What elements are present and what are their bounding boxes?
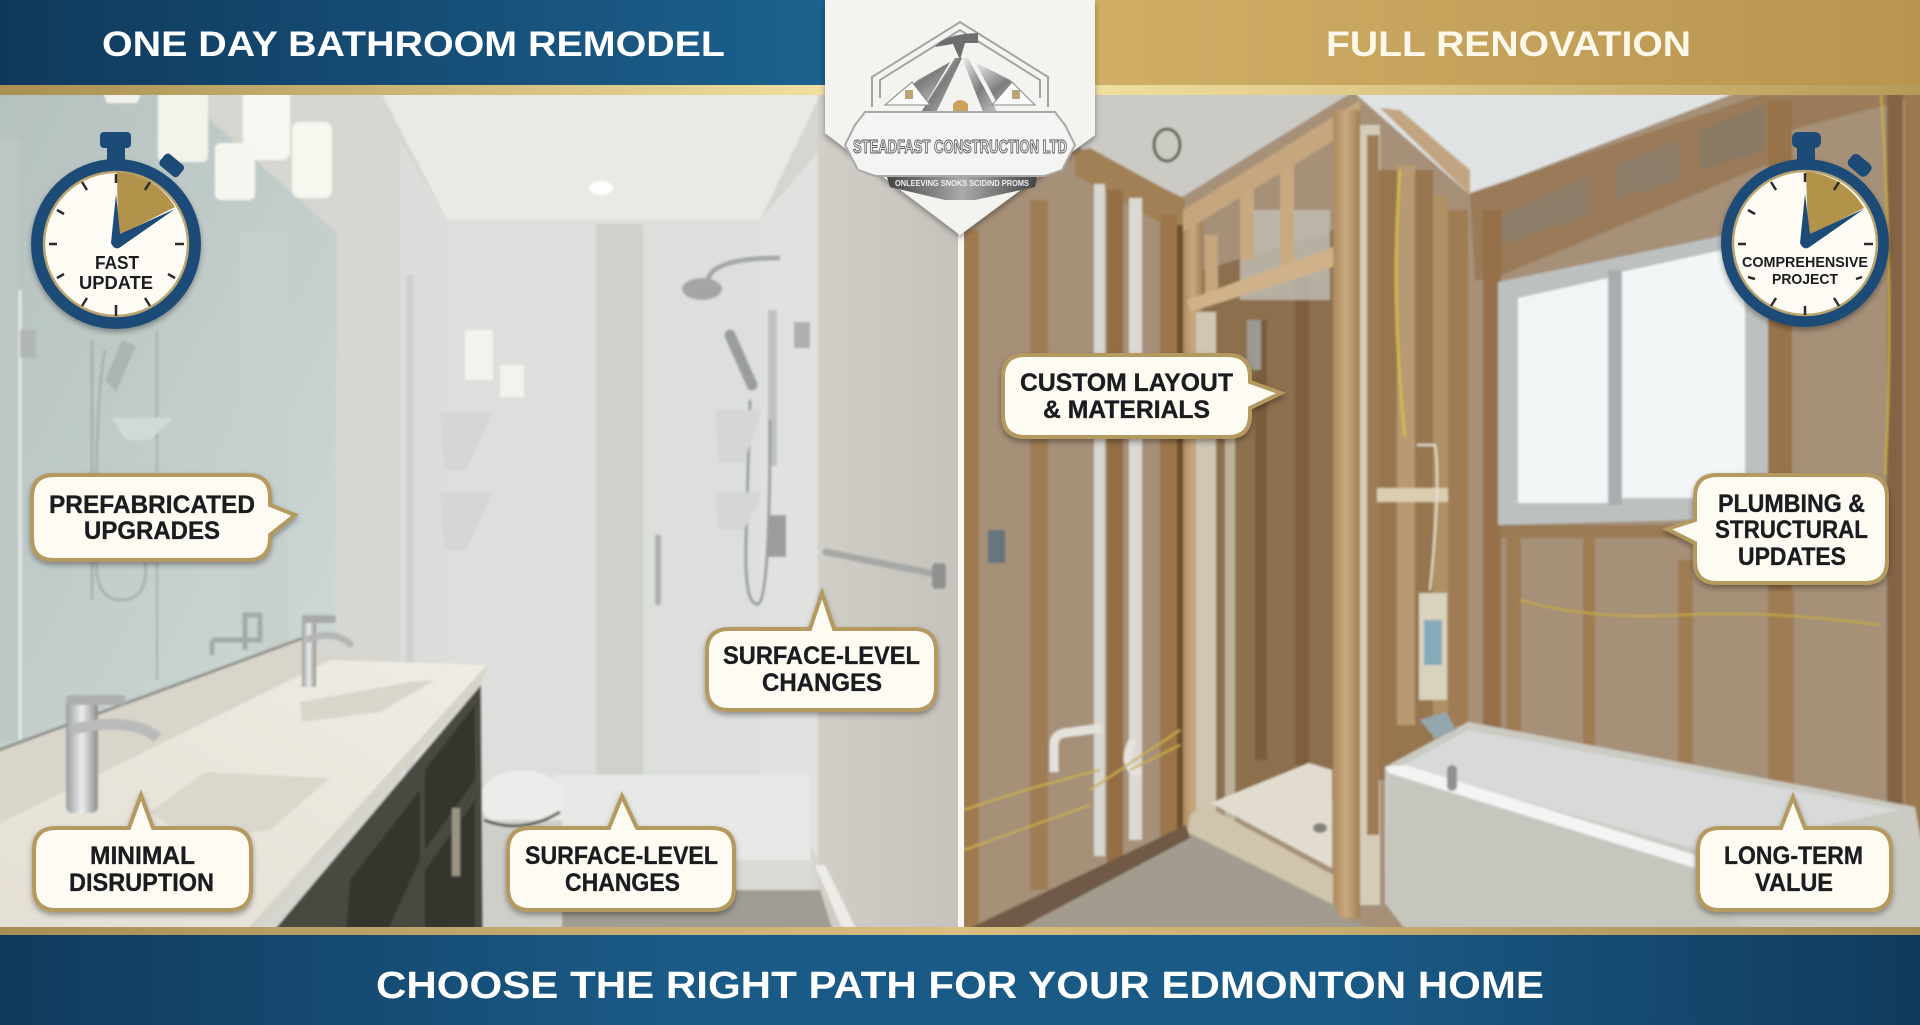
- logo panel: [825, 0, 1095, 235]
- stopwatch: fast update: FAST: [95, 253, 139, 273]
- countertop: [0, 660, 487, 947]
- callout: minimal disruption: MINIMAL: [90, 842, 195, 870]
- callout: plumbing and structural updates: PLUMBING &: [1718, 490, 1865, 518]
- logo outline: [872, 22, 1048, 107]
- callout: prefabricated upgrades: PREFABRICATED: [49, 491, 255, 519]
- sinks: [300, 680, 435, 722]
- stopwatch: fast update: [31, 132, 201, 329]
- gold divider band: [0, 85, 1920, 95]
- wall lights: [102, 95, 332, 201]
- shower walls: [447, 220, 760, 785]
- footer gold band: [0, 927, 1920, 935]
- callout: minimal disruption: [34, 795, 251, 910]
- callout: prefabricated upgrades: [32, 475, 295, 560]
- photo: full renovation framing: [944, 75, 1920, 947]
- divider between photos: [958, 95, 964, 927]
- left wall studs: [964, 190, 1185, 927]
- backsplash: [0, 641, 302, 754]
- logo banner: [845, 112, 1075, 176]
- mirror with reflection: [0, 75, 337, 760]
- concrete floor: [1023, 832, 1372, 927]
- footer banner: [0, 935, 1920, 1025]
- callout: custom layout and materials: & MATERIALS: [1043, 396, 1210, 424]
- shower fittings: [447, 254, 947, 606]
- faucets: [66, 615, 352, 813]
- callout: surface-level changes upper: [707, 593, 936, 710]
- header: full renovation: FULL RENOVATION: [1326, 25, 1691, 64]
- bathtub: [1385, 712, 1920, 947]
- callout: surface-level changes upper: SURFACE-LEVEL: [723, 642, 920, 670]
- callout: surface-level changes lower: CHANGES: [565, 869, 680, 897]
- logo tagline: [887, 177, 1037, 200]
- stopwatch: comprehensive project: [1721, 132, 1889, 327]
- shower enclosure frame: [1183, 100, 1360, 830]
- window: [1498, 228, 1768, 538]
- shower base: [1211, 763, 1332, 868]
- lower wall studs: [1506, 535, 1880, 800]
- shower floor and bathroom floor: [555, 775, 810, 865]
- callout: long-term value: [1698, 797, 1891, 910]
- right corridor studs: [1332, 110, 1450, 919]
- icon: hammer and roofs: [885, 33, 1035, 117]
- electrical outlet: [988, 530, 1005, 563]
- toilet: [480, 770, 563, 927]
- stopwatch: comprehensive project: COMPREHENSIVE: [1742, 254, 1868, 271]
- header: one day bathroom remodel: ONE DAY BATHROOM REMODEL: [102, 25, 725, 64]
- callout: plumbing and structural updates: STRUCTURAL: [1715, 516, 1868, 544]
- ceilings: [1079, 95, 1350, 198]
- callout: minimal disruption: DISRUPTION: [69, 869, 214, 897]
- yellow wires: [964, 730, 1180, 850]
- photo: finished bathroom remodel: [0, 75, 978, 947]
- callout: surface-level changes lower: [508, 796, 734, 910]
- right wall header lumber: [1446, 95, 1920, 836]
- left wall beam: [1075, 148, 1185, 235]
- vanity cabinet: [275, 684, 484, 927]
- header: full renovation: [1095, 0, 1920, 85]
- callout: custom layout and materials: CUSTOM LAYOUT: [1020, 369, 1233, 397]
- outer wall: [818, 95, 958, 927]
- ceiling wire loop: [1154, 129, 1180, 161]
- pipes: [1054, 184, 1142, 856]
- callout: long-term value: VALUE: [1755, 869, 1833, 897]
- logo company name: STEADFAST CONSTRUCTION LTD: [853, 137, 1067, 157]
- callout: prefabricated upgrades: UPGRADES: [84, 517, 220, 545]
- callout: custom layout and materials: [1003, 355, 1281, 437]
- header: one day bathroom remodel: [0, 0, 825, 85]
- callout: surface-level changes upper: CHANGES: [762, 669, 882, 697]
- footer banner: CHOOSE THE RIGHT PATH FOR YOUR EDMONTON HOME: [376, 965, 1544, 1007]
- callout: long-term value: LONG-TERM: [1724, 842, 1863, 870]
- callout: plumbing and structural updates: UPDATES: [1738, 543, 1846, 571]
- wall and soffit: [170, 75, 400, 660]
- callout: plumbing and structural updates: [1667, 475, 1887, 583]
- stopwatch: fast update: UPDATE: [79, 273, 153, 293]
- logo tagline: ONLEEVING SNOKS SCIDIND PROMS: [895, 179, 1030, 188]
- callout: surface-level changes lower: SURFACE-LEVEL: [525, 842, 718, 870]
- stopwatch: comprehensive project: PROJECT: [1772, 271, 1838, 288]
- shower ceiling: [382, 95, 818, 220]
